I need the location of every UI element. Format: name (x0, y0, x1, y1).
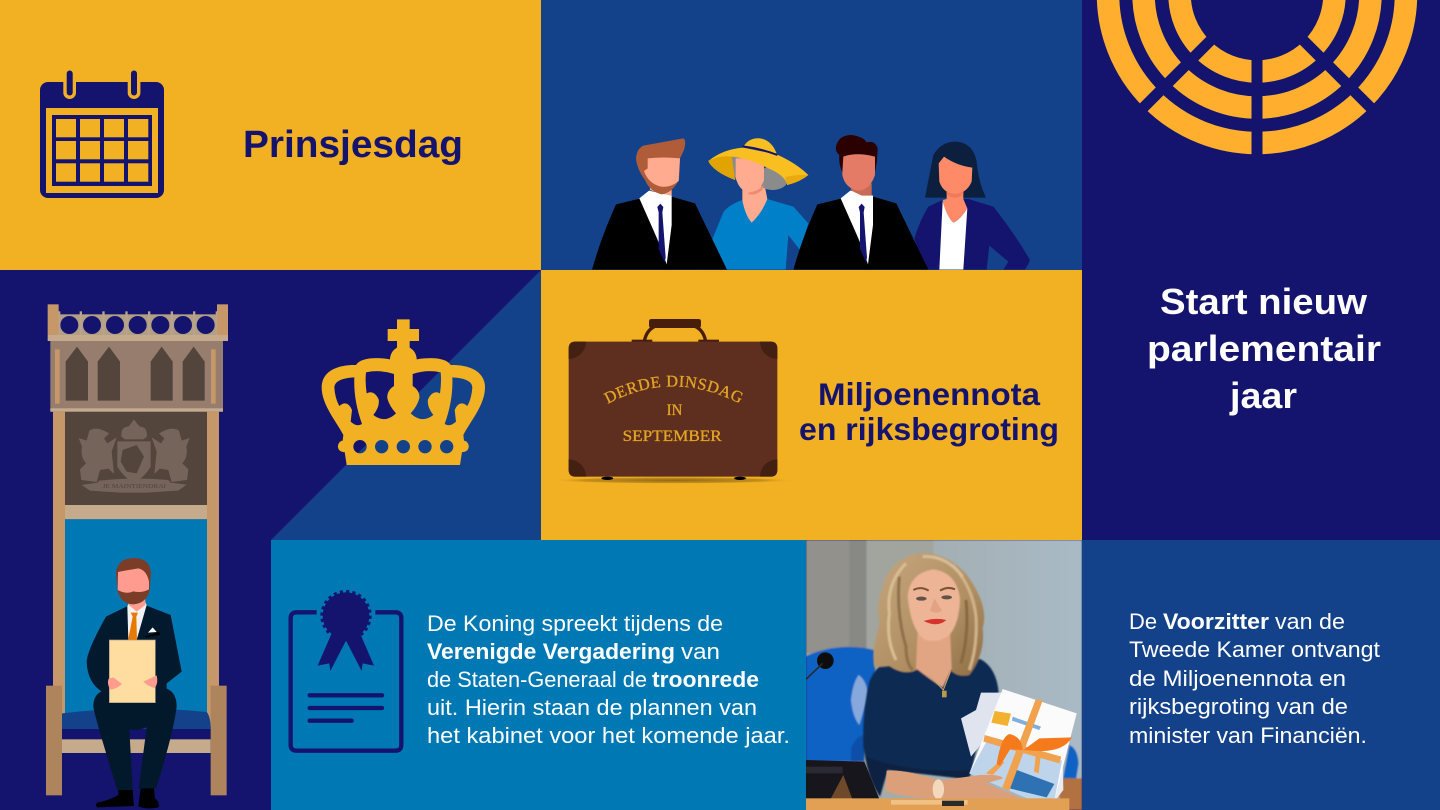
icon: parliament semicircle (1108, 0, 1406, 170)
text block: troonrede: uit. Hierin staan de plannen van (427, 695, 757, 720)
heading: Prinsjesdag: Prinsjesdag (243, 124, 463, 166)
coat of arms (79, 419, 190, 493)
text block: troonrede: het kabinet voor het komende jaar. (427, 723, 790, 748)
suitcase body (569, 342, 777, 477)
heading: Miljoenennota en rijksbegroting: en rijksbegroting (799, 411, 1059, 447)
throne posts (53, 412, 219, 727)
photo: Voorzitter with Miljoenennota (806, 540, 1082, 810)
text block: Voorzitter ontvangt: Voorzitter (1163, 609, 1269, 634)
text block: Voorzitter ontvangt: rijksbegroting van de (1129, 694, 1348, 719)
king shoes (96, 788, 159, 809)
pocket square (145, 627, 160, 637)
text block: Voorzitter ontvangt: De (1129, 609, 1157, 634)
illustration: four people (592, 135, 1030, 270)
icon: certificate with rosette (291, 592, 401, 751)
text block: troonrede: De Koning spreekt tijdens de (427, 611, 723, 636)
suitcase label: Derde dinsdag in september: DERDE DINSDAG (603, 376, 743, 404)
person: woman with dark hair (914, 142, 1030, 270)
panel: navy right column (1082, 0, 1440, 540)
photo arm and desk (806, 771, 1069, 810)
text block: troonrede: Verenigde Vergadering (427, 639, 675, 664)
heading: Miljoenennota en rijksbegroting: Miljoenennota (818, 376, 1041, 412)
throne back panel (65, 412, 207, 505)
panel: diagonal crown cell (271, 270, 541, 540)
suitcase wheels (601, 477, 746, 480)
text block: Voorzitter ontvangt: Tweede Kamer ontvangt (1129, 637, 1380, 662)
throne seat rail (62, 739, 211, 753)
photo face details (913, 588, 955, 697)
text block: Voorzitter ontvangt: van de (1275, 609, 1345, 634)
king (87, 558, 182, 809)
suitcase corners (569, 342, 777, 477)
panel: blue top middle (541, 0, 1082, 270)
suitcase shadow (552, 477, 795, 484)
text block: troonrede: de Staten-Generaal de (427, 667, 647, 692)
heading: Start nieuw parlementair jaar: parlementair (1147, 328, 1381, 369)
text block: Voorzitter ontvangt: de Miljoenennota en (1129, 666, 1346, 691)
illustration: throne with king (46, 304, 228, 809)
throne arms (46, 686, 227, 795)
throne canopy (50, 341, 223, 412)
suitcase handle (632, 319, 719, 342)
suitcase label: Derde dinsdag in september: IN (667, 402, 682, 419)
heading: Miljoenennota en rijksbegroting (799, 376, 1059, 447)
icon: crown (322, 319, 485, 465)
illustration: suitcase (565, 319, 782, 484)
text block: Voorzitter ontvangt (1129, 609, 1380, 748)
king legs (93, 689, 177, 790)
panel: yellow middle (541, 270, 1082, 540)
photo microphone and monitor (806, 652, 880, 801)
text block: Voorzitter ontvangt: minister van Financiën. (1129, 723, 1367, 748)
heading: Start nieuw parlementair jaar: jaar (1229, 375, 1297, 416)
photo documents with ribbon (961, 689, 1077, 803)
king hands (108, 675, 157, 689)
king jacket (87, 606, 182, 693)
coat of arms: JE MAINTIENDRAI (103, 484, 166, 490)
suitcase label: Derde dinsdag in september (603, 376, 743, 445)
icon: calendar (40, 70, 164, 198)
panel: navy left column (0, 270, 271, 810)
heading: Start nieuw parlementair jaar: Start nieuw (1160, 281, 1368, 322)
photo background and chair (806, 540, 1082, 810)
document (109, 640, 155, 703)
throne railing (48, 304, 228, 341)
panel: blue bottom right (1082, 540, 1440, 810)
king head (116, 558, 151, 604)
king neck (129, 598, 145, 612)
text block: troonrede: troonrede (652, 667, 759, 692)
text block: troonrede (427, 611, 790, 748)
panel: yellow top left (0, 0, 541, 270)
panel: light blue speech text (271, 540, 806, 810)
person: man with beard (592, 138, 727, 270)
king shirt and tie (127, 602, 147, 641)
photo woman body and hair (863, 553, 999, 797)
suitcase label: Derde dinsdag in september: SEPTEMBER (623, 428, 723, 445)
heading: Start nieuw parlementair jaar (1147, 281, 1381, 416)
throne seat (62, 709, 211, 729)
person: man with dark hair (793, 135, 928, 270)
text block: troonrede: van (681, 639, 720, 664)
person: woman with hat (700, 138, 808, 270)
